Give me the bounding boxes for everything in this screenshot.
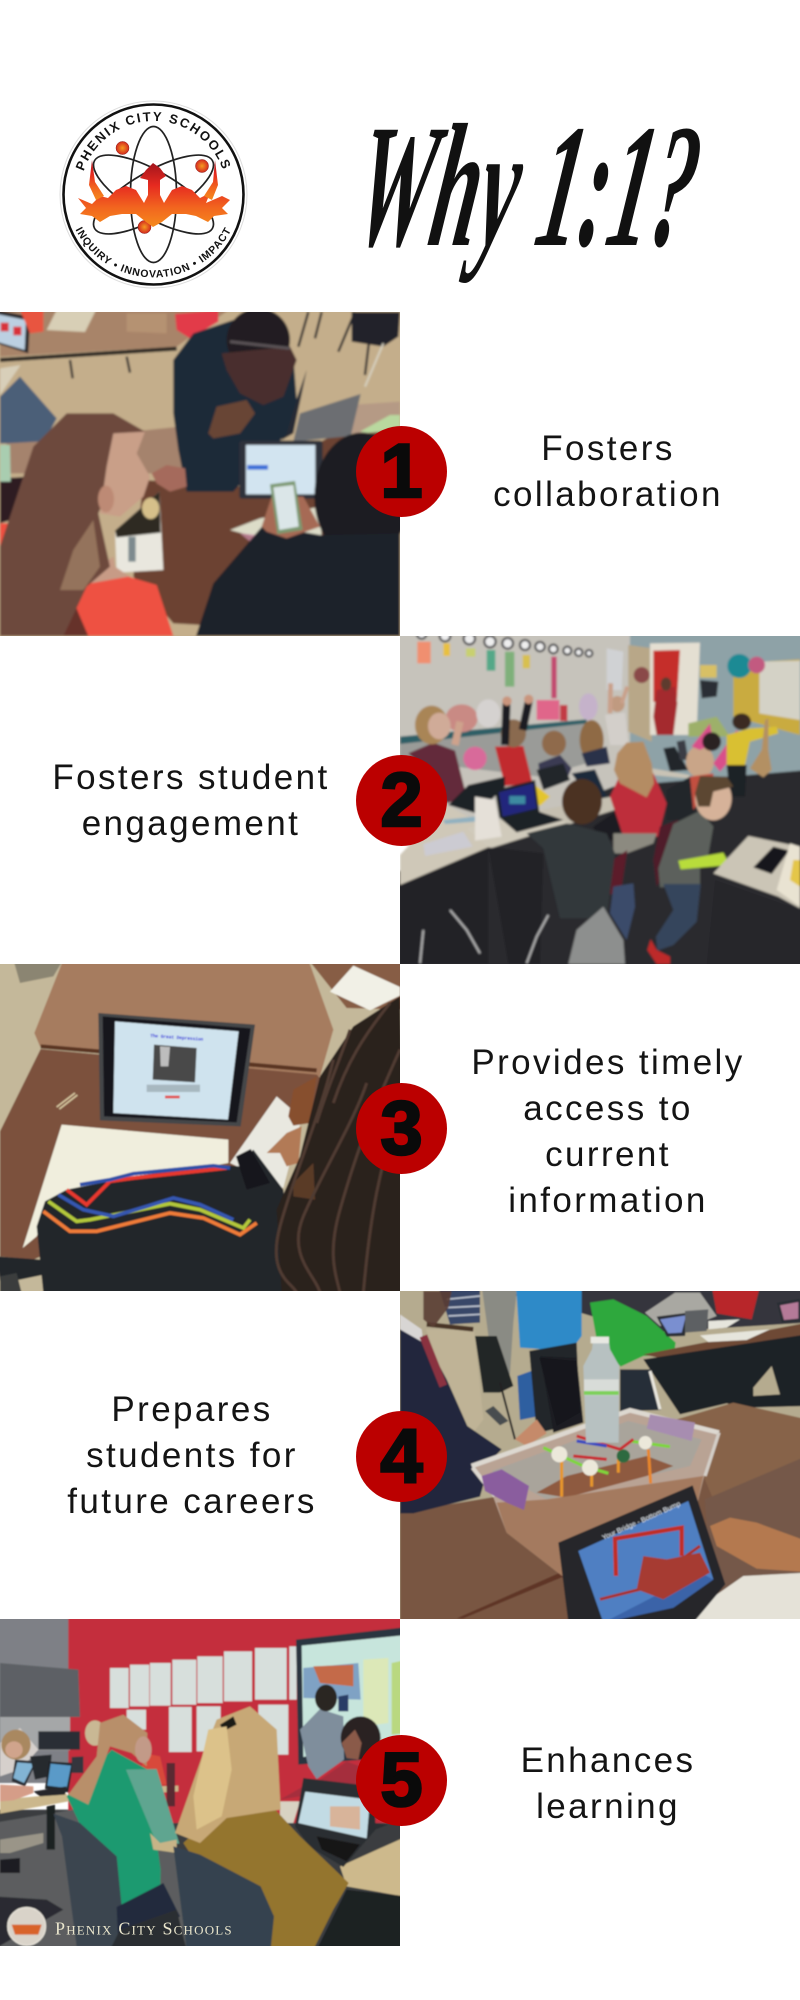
atom orbits: [83, 126, 224, 262]
text: fosters collaboration: [493, 429, 723, 514]
watermark text: Phenix City Schools: [55, 1918, 232, 1938]
school logo: [60, 100, 248, 288]
number badge 2: 2: [380, 758, 423, 843]
number badge 5: 5: [380, 1738, 423, 1823]
number badge 1: [356, 426, 447, 517]
text: prepares students for future careers: [67, 1390, 317, 1521]
text: enhances learning: Enhances: [521, 1741, 695, 1780]
phoenix: [78, 160, 230, 227]
number badge 1: 1: [380, 429, 423, 514]
bottom-left school seal: [8, 1907, 46, 1945]
tablet heading: Your Bridge - Bottom Bump: [601, 1501, 682, 1542]
text: timely access to information: [471, 1043, 745, 1220]
text: fosters student engagement: engagement: [82, 804, 300, 843]
text: enhances learning: [521, 1741, 695, 1826]
text: timely access to information: current: [545, 1135, 671, 1174]
text: prepares students for future careers: Prepares: [111, 1390, 273, 1429]
text: timely access to information: access to: [523, 1089, 693, 1128]
tablet page heading: The Great Depression: [150, 1033, 204, 1043]
logo bottom lettering: INQUIRY • INNOVATION • IMPACT: [76, 226, 230, 278]
text: timely access to information: Provides timely: [471, 1043, 745, 1082]
text: fosters collaboration: collaboration: [493, 475, 723, 514]
number badge 3: 3: [380, 1086, 423, 1171]
photo 1: students collaborating at table: [0, 312, 400, 636]
text: enhances learning: learning: [536, 1787, 680, 1826]
text: prepares students for future careers: students for: [86, 1436, 298, 1475]
number badge 2: [356, 755, 447, 846]
number badge 4: 4: [380, 1414, 423, 1499]
photo 2: classroom with hands raised: [400, 636, 800, 964]
number badge 4: [356, 1411, 447, 1502]
number badge 5: [356, 1735, 447, 1826]
text: prepares students for future careers: future careers: [67, 1482, 317, 1521]
text: fosters collaboration: Fosters: [541, 429, 675, 468]
text: fosters student engagement: Fosters student: [52, 758, 330, 797]
text: timely access to information: information: [508, 1181, 708, 1220]
logo top lettering: PHENIX CITY SCHOOLS: [76, 112, 230, 171]
electrons: [116, 142, 208, 234]
photo 4: bridge model in plastic bin with tablet: [400, 1291, 800, 1619]
number badge 3: [356, 1083, 447, 1174]
photo 3: student with tablet showing The Great Depression: [0, 964, 400, 1291]
text: fosters student engagement: [52, 758, 330, 843]
photo 5: students on laptops in front of red wall: [0, 1619, 400, 1946]
